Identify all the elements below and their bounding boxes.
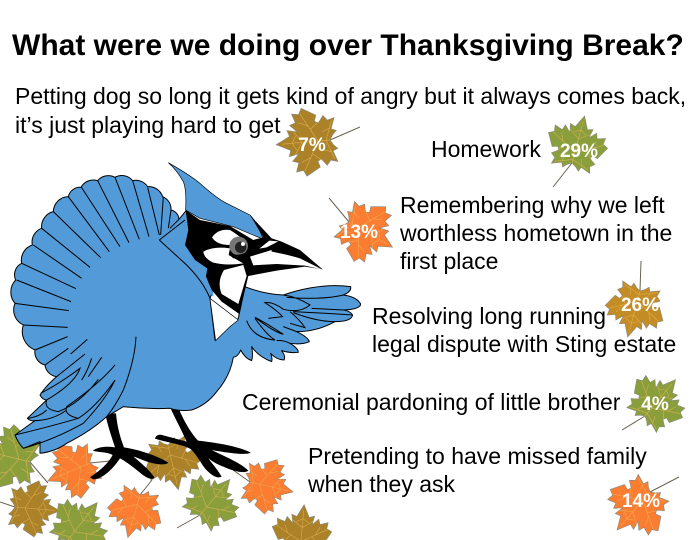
bird beak bbox=[250, 241, 323, 269]
leaf: 13 percent bbox=[328, 191, 408, 274]
feather lines bbox=[15, 177, 210, 365]
leaf: 29 percent: 29% bbox=[560, 141, 598, 162]
text: remembering: Remembering why we left bbox=[400, 192, 665, 218]
leaf: 7 percent: 7% bbox=[298, 135, 326, 156]
text: sting estate: legal dispute with Sting estate bbox=[372, 331, 676, 357]
right wing feather lines bbox=[247, 295, 353, 343]
leaf: 7 percent bbox=[273, 106, 360, 179]
leaf: 14 percent: 14% bbox=[622, 491, 660, 512]
leaf: 29 percent bbox=[541, 108, 614, 187]
text: ceremonial pardoning: Ceremonial pardoning of little brother bbox=[242, 389, 621, 415]
text: pretending bbox=[307, 443, 647, 497]
title: What were we doing over Thanksgiving Break? bbox=[12, 29, 684, 62]
leaf: 26 percent bbox=[599, 261, 670, 345]
leaf: 14 percent bbox=[593, 466, 679, 540]
text: homework: Homework bbox=[431, 136, 541, 162]
white face patches bbox=[203, 230, 247, 304]
illustration: blue jay turkey bbox=[11, 163, 361, 479]
black face mask bbox=[185, 210, 323, 314]
lower wing feather lines bbox=[15, 337, 136, 448]
text: petting dog: Petting dog so long it gets kind of angry but it always comes back, bbox=[15, 83, 686, 109]
leaf: 13 percent: 13% bbox=[340, 222, 378, 243]
text: remembering: first place bbox=[400, 248, 498, 274]
leaf: 4 percent: 4% bbox=[641, 394, 669, 415]
bird eye bbox=[229, 237, 252, 258]
text: pretending: Pretending to have missed family bbox=[308, 443, 647, 469]
text: sting estate: Resolving long running bbox=[372, 303, 606, 329]
text: sting estate bbox=[372, 303, 676, 357]
text: pretending: when they ask bbox=[307, 471, 456, 497]
pile of leaves bbox=[0, 418, 334, 540]
leaf: 4 percent bbox=[618, 360, 698, 440]
bird body, tail fan, wings bbox=[11, 163, 361, 453]
white chest bbox=[210, 298, 238, 341]
text: remembering: worthless hometown in the bbox=[399, 220, 672, 246]
leaf: 26 percent: 26% bbox=[621, 295, 659, 316]
text: petting dog: it’s just playing hard to get bbox=[15, 112, 281, 138]
head crest and neck bbox=[168, 163, 263, 239]
bird legs and feet bbox=[90, 407, 251, 479]
text: petting dog bbox=[15, 83, 686, 138]
text: remembering bbox=[399, 192, 672, 274]
